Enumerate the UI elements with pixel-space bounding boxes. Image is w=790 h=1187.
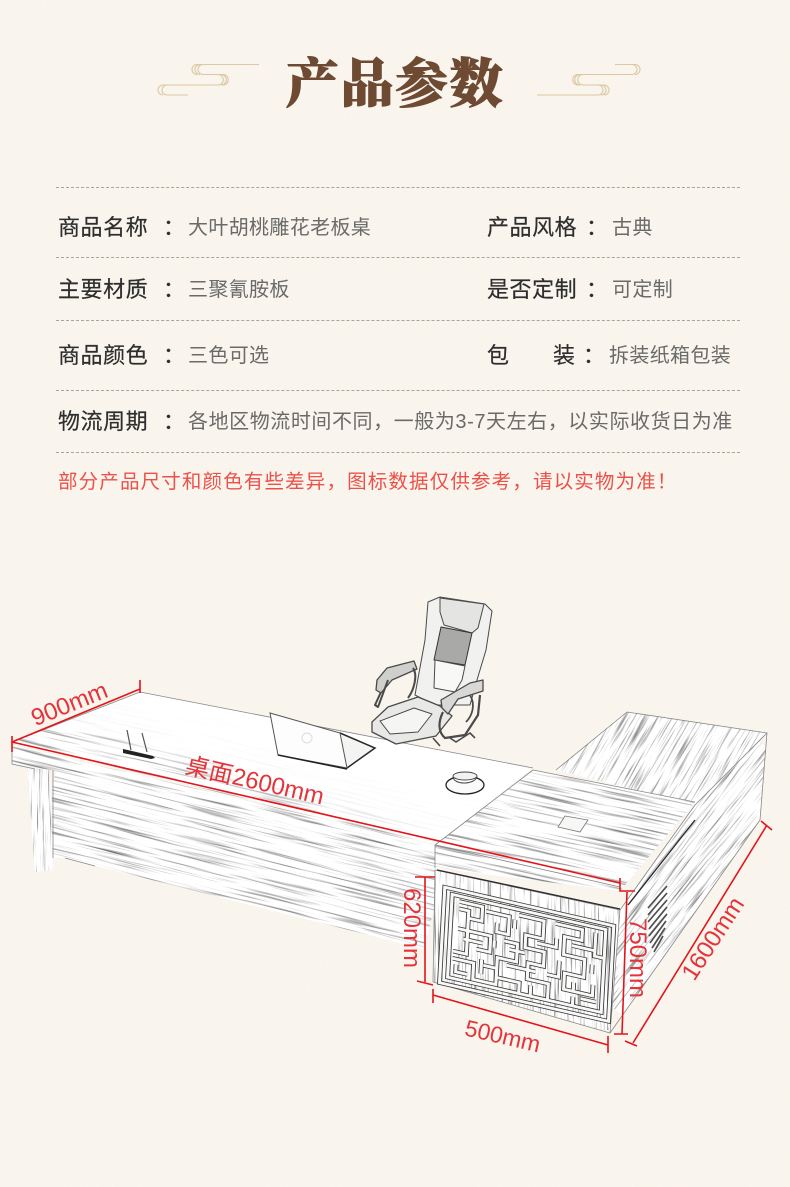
row: material: 是否定制	[487, 277, 577, 302]
spec table	[56, 187, 740, 453]
row: colour and packaging: ：	[583, 343, 606, 368]
row: material	[58, 277, 673, 302]
dimension: 750mm	[614, 892, 651, 1034]
row: material: 可定制	[612, 279, 673, 301]
row: product name: ：	[586, 215, 609, 240]
dimension: 620mm	[398, 877, 435, 985]
dimension: 500mm: 500mm	[462, 1015, 543, 1057]
row: product name: 古典	[612, 217, 653, 239]
side cabinet top	[556, 712, 766, 805]
row: colour and packaging: 拆装纸箱包装	[609, 345, 731, 367]
left leg	[27, 768, 53, 872]
row: material: 主要材质	[58, 277, 148, 302]
row: material: ：	[163, 277, 186, 302]
row: colour and packaging: 三色可选	[188, 345, 269, 367]
dimension: 1600mm	[625, 821, 772, 1046]
icon: office chair	[372, 597, 492, 746]
title: 产品参数	[286, 42, 504, 118]
dimension: 900mm: 900mm	[27, 677, 112, 732]
row: colour and packaging: 商品颜色	[58, 343, 148, 368]
modesty panel	[52, 771, 435, 949]
dimension: 1600mm: 1600mm	[677, 892, 750, 985]
row: colour and packaging: 装	[553, 343, 576, 368]
icon: fretwork grille	[440, 887, 614, 1021]
row: material: 三聚氰胺板	[188, 279, 290, 301]
row: product name: 商品名称	[58, 215, 148, 240]
desktop edge band	[12, 746, 435, 866]
dimension: 500mm	[433, 989, 608, 1057]
row: logistics: 各地区物流时间不同，一般为3-7天左右，以实际收货日为准	[188, 411, 733, 433]
row: logistics: ：	[163, 409, 186, 434]
row: product name: ：	[163, 215, 186, 240]
row: colour and packaging	[58, 343, 731, 368]
dimension: 2600mm: 桌面2600mm	[183, 752, 327, 811]
row: logistics: 物流周期	[58, 409, 148, 434]
row: colour and packaging: ：	[163, 343, 186, 368]
icon: slot on desk	[558, 816, 588, 832]
row: product name: 大叶胡桃雕花老板桌	[188, 217, 371, 239]
icon: side vent	[648, 886, 667, 952]
return desktop	[435, 770, 694, 891]
icon: left cloud ornament	[158, 64, 259, 96]
row: product name: 产品风格	[487, 215, 577, 240]
red notice: 部分产品尺寸和颜色有些差异，图标数据仅供参考，请以实物为准！	[58, 471, 678, 493]
row: material: ：	[586, 277, 609, 302]
icon: coffee cup	[446, 772, 484, 794]
icon: right cloud ornament	[537, 64, 640, 96]
side cabinet right face	[612, 742, 766, 1014]
row: colour and packaging: 包	[487, 343, 510, 368]
dimension: 2600mm	[12, 742, 635, 891]
front grille backing	[434, 870, 620, 1030]
desk body	[12, 662, 768, 1046]
dimension: 900mm	[12, 677, 140, 752]
icon: laptop	[270, 713, 375, 769]
dimension: 750mm: 750mm	[624, 918, 651, 998]
main desktop	[15, 692, 532, 845]
icon: tablet stand	[123, 730, 155, 759]
dimension: 620mm: 620mm	[398, 888, 425, 968]
desk diagram	[11, 596, 772, 1053]
row: product name	[58, 215, 653, 240]
